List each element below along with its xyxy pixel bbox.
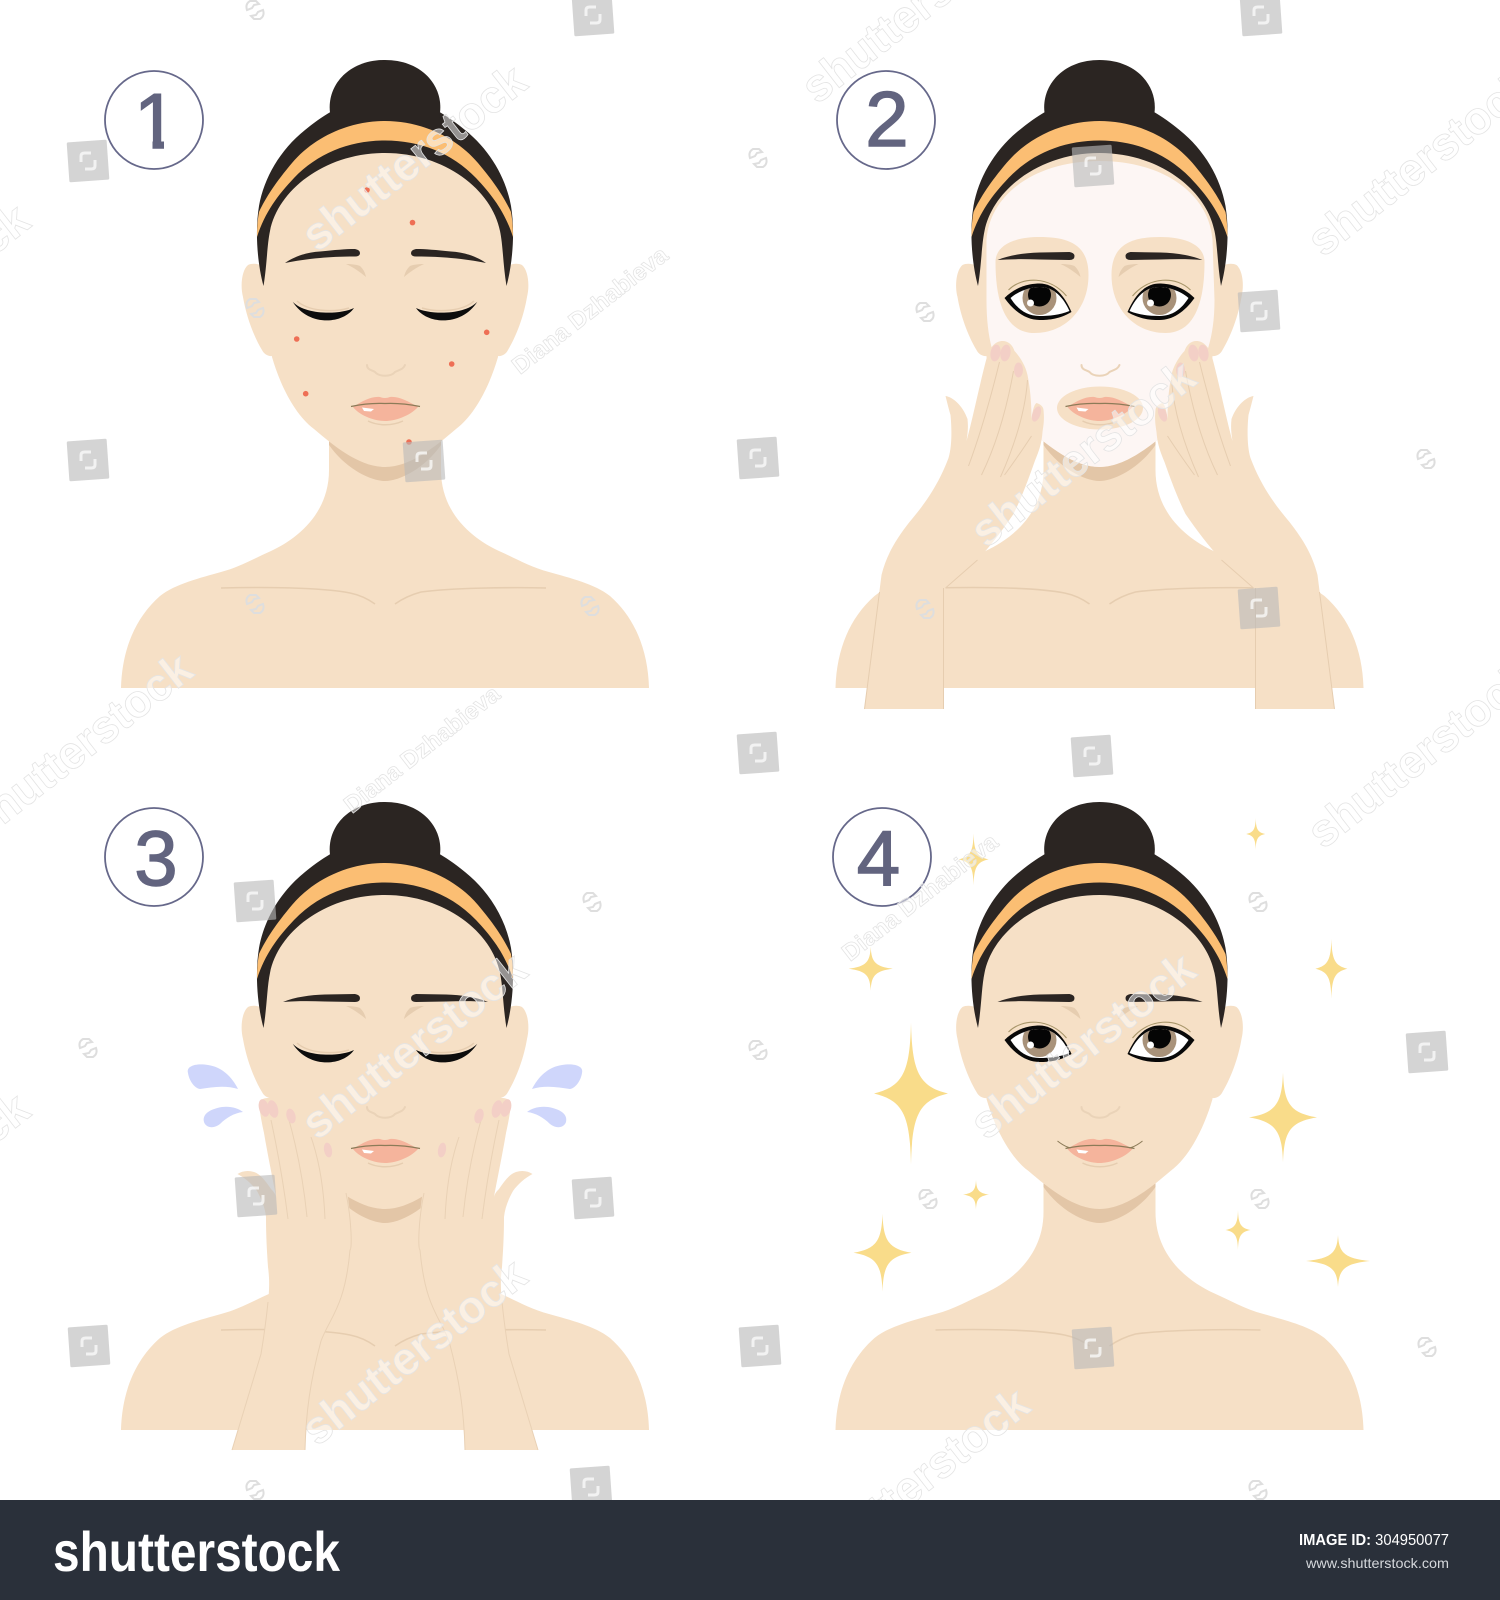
stock photo watermarks: shutterstock (794, 1376, 1039, 1584)
stock photo watermarks: shutterstock (960, 941, 1205, 1149)
step number 2 (837, 71, 935, 169)
step number 3: 3 (134, 814, 178, 902)
left hand (232, 1097, 351, 1450)
step number 3 (105, 808, 203, 906)
step number 2: 2 (865, 75, 909, 163)
step number 1: 1 (134, 77, 177, 165)
stock photo watermarks: shutterstock (291, 53, 536, 261)
step number 1 (105, 71, 203, 169)
stock photo watermarks: Diana Dzhabieva (339, 680, 506, 819)
woman: base (836, 60, 1364, 688)
website: www.shutterstock.com (1305, 1555, 1449, 1571)
facial features (998, 252, 1202, 425)
step number 4 (833, 808, 931, 906)
panel: step 2, applying face mask (836, 60, 1364, 709)
step number 4: 4 (857, 814, 900, 902)
footer bar (0, 1500, 1500, 1600)
woman: closed eyes (121, 60, 649, 688)
right hand (1155, 341, 1334, 709)
stock photo watermarks: shutterstock (291, 1247, 536, 1455)
sparkles (849, 818, 1370, 1292)
woman: open eyes, smile (836, 802, 1364, 1430)
footer logo: shutterstock (53, 1520, 341, 1583)
panel: step 1, skin with pimples (105, 60, 649, 688)
right hand (419, 1097, 538, 1450)
water drops (188, 1064, 582, 1127)
stock photo watermarks: Diana Dzhabieva (837, 828, 1004, 967)
stock photo watermarks: shutterstock (960, 349, 1205, 557)
left hand (864, 341, 1044, 709)
pimples (294, 187, 490, 445)
stock photo watermarks: shutterstock (291, 941, 536, 1149)
woman: closed eyes (121, 802, 649, 1430)
stock photo watermarks: Diana Dzhabieva (507, 241, 674, 380)
white face mask with openings (986, 161, 1214, 467)
image id: IMAGE ID: 304950077 (1299, 1532, 1449, 1549)
panel: step 3, rinsing with water (105, 802, 649, 1450)
panel: step 4, clean glowing skin (833, 802, 1364, 1430)
